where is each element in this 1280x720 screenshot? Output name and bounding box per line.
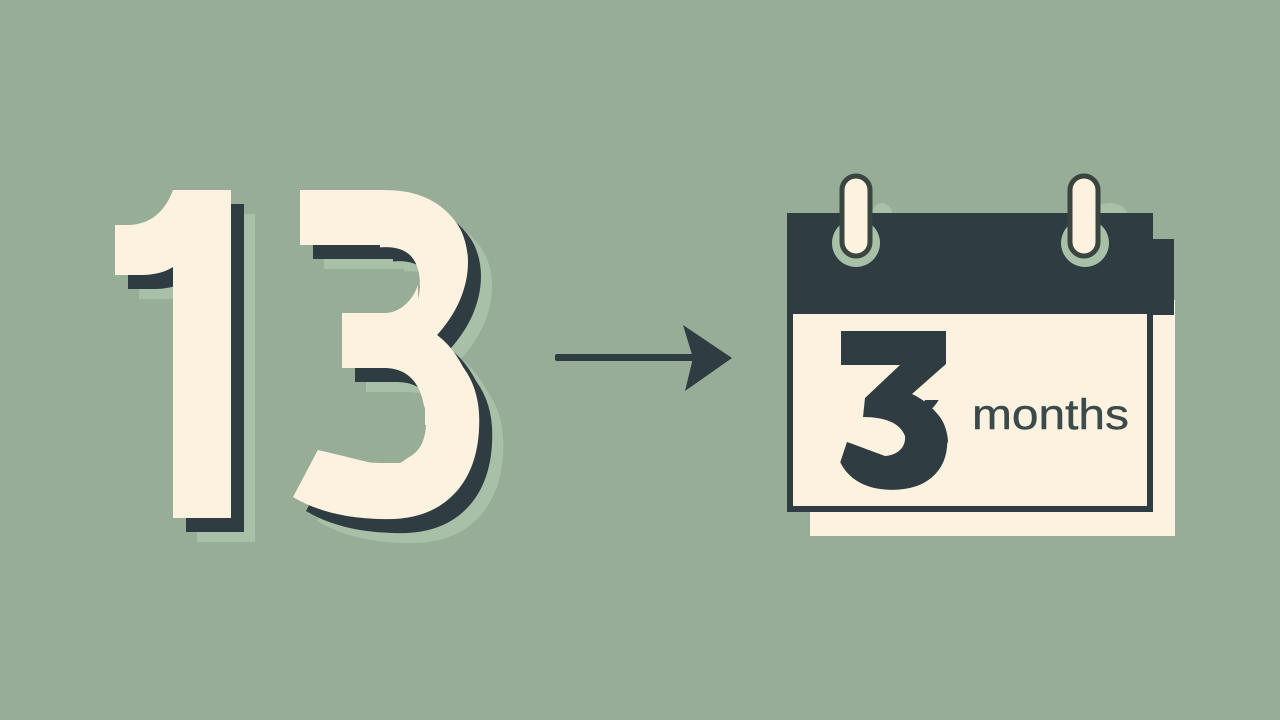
header band [787,213,1153,314]
infographic canvas [115,174,1175,543]
number 13: dark shadow [128,204,492,534]
number 13: dark shadow: 3 [303,129,497,607]
calendar icon [787,176,1175,536]
right ring [1061,176,1109,267]
back page [810,300,1175,536]
number 13: cream face [115,190,480,520]
number 13: dark shadow: 1 [78,111,308,629]
front page [790,300,1150,509]
big number 13 [115,190,504,543]
number 13: pale shadow: 1 [89,121,319,639]
left ring [832,176,880,267]
number 13: pale shadow [139,214,504,543]
back binding [1100,239,1174,315]
number 13: cream face: 1 [65,97,295,615]
calendar number 3: 3 [839,306,945,518]
pale ring peeks [872,203,1127,225]
arrow [555,325,732,391]
months label: months [972,391,1129,439]
number 13: cream face: 3 [290,115,484,593]
number 13: pale shadow: 3 [314,139,508,617]
